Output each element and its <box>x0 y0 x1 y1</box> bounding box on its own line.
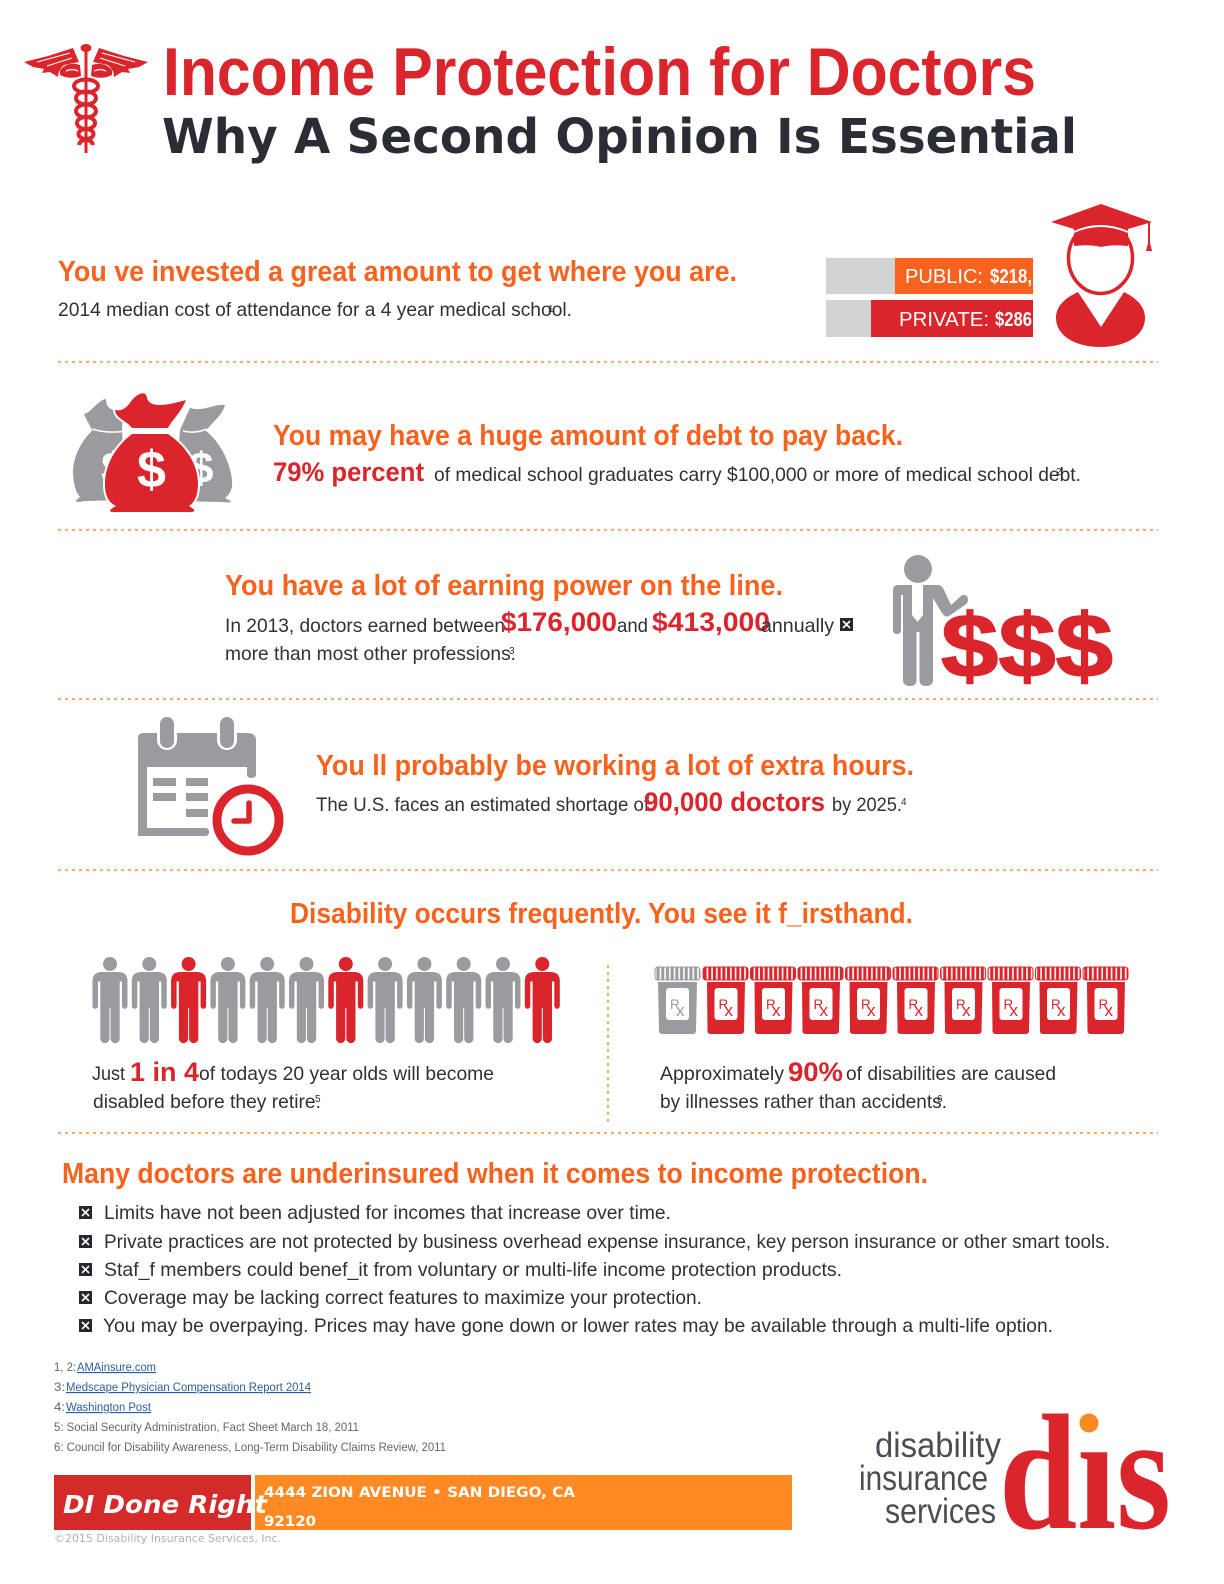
pictogram: prescription bottles <box>655 967 1128 1034</box>
bullet list: Private practices are not protected by business overhead expense insurance, key person insurance or other smart tools. <box>104 1231 1110 1253</box>
pictogram: prescription bottles: R <box>861 997 871 1012</box>
body text: 4 <box>901 797 907 808</box>
footnotes: 3: <box>54 1382 65 1394</box>
text: 1 in 4: disabled before they retire. <box>93 1091 321 1113</box>
bullet list: Limits have not been adjusted for incomes that increase over time. <box>104 1202 671 1224</box>
icon: money bags: $ <box>137 441 166 499</box>
stat: 79% percent: 79% percent <box>273 457 424 487</box>
heading: You have a lot of earning power on the line. <box>225 570 783 602</box>
pictogram: prescription bottles: R <box>908 997 918 1012</box>
pictogram: prescription bottles: x <box>914 1001 924 1020</box>
bar: private cost: $286 <box>995 309 1032 331</box>
pictogram: prescription bottles: R <box>956 997 966 1012</box>
text: 90%: by illnesses rather than accidents. <box>660 1091 947 1113</box>
footnotes: Washington Post <box>66 1402 152 1414</box>
footnote marker: 3 <box>509 646 515 657</box>
heading: You ve invested a great amount to get where you are. <box>58 256 737 288</box>
pictogram: prescription bottles: R <box>1098 997 1108 1012</box>
icon: businessman <box>893 555 968 686</box>
text: 1 in 4: Just <box>92 1063 126 1085</box>
icon: calendar and clock <box>138 717 279 851</box>
pictogram: prescription bottles: R <box>1004 997 1014 1012</box>
body text line 1: $176,000 <box>501 607 617 637</box>
heading: You ll probably be working a lot of extra hours. <box>316 750 914 782</box>
icon: money bags <box>73 393 232 512</box>
pictogram: prescription bottles: R <box>718 997 728 1012</box>
heading: Many doctors are underinsured when it comes to income protection. <box>62 1158 928 1190</box>
text: 90% <box>660 1057 1056 1113</box>
body text line 2: more than most other professions. <box>225 643 516 665</box>
logo: disability insurance services: services <box>885 1492 996 1531</box>
bar: public cost: $218, <box>990 266 1032 288</box>
logo: disability insurance services: insurance <box>859 1459 988 1498</box>
text: 1 in 4: 1 in 4 <box>130 1057 199 1087</box>
pictogram: prescription bottles: R <box>766 997 776 1012</box>
panel: disability frequency <box>92 898 1128 1126</box>
bullet list <box>79 1202 1110 1337</box>
logo: disability insurance services <box>859 1381 1171 1564</box>
footnotes: AMAinsure.com <box>77 1362 156 1374</box>
bullet list: Staf_f members could benef_it from voluntary or multi-life income protection products. <box>104 1259 842 1281</box>
bar: public cost: PUBLIC: <box>905 266 983 288</box>
logo: disability insurance services: dis <box>999 1381 1171 1564</box>
body text line 1: In 2013, doctors earned between <box>225 615 505 637</box>
subtitle: Why A Second Opinion Is Essential <box>162 109 1077 165</box>
text: 1 in 4: 5 <box>315 1094 321 1105</box>
logo: disability insurance services: disability <box>875 1426 1001 1465</box>
footnotes: 6: Council for Disability Awareness, Long-Term Disability Claims Review, 2011 <box>54 1442 446 1454</box>
body text: 2014 median cost of attendance for a 4 year medical school. <box>58 299 572 321</box>
footnotes: Medscape Physician Compensation Report 2014 <box>66 1382 312 1394</box>
body text line 1: annually <box>761 615 834 637</box>
text: 1 in 4 <box>92 1057 494 1113</box>
icon: dollar signs: $$$ <box>941 597 1113 697</box>
pictogram: people 1 in 4 <box>92 957 560 1043</box>
body text: 90,000 doctors <box>644 787 825 817</box>
pictogram: prescription bottles: x <box>867 1001 876 1020</box>
copyright: ©2015 Disability Insurance Services, Inc. <box>54 1533 281 1545</box>
footnotes: 4: <box>54 1402 65 1414</box>
text: 90%: 6 <box>937 1094 943 1105</box>
panel: investment <box>58 204 1152 347</box>
bullet list: Coverage may be lacking correct features to maximize your protection. <box>104 1287 702 1309</box>
pictogram: prescription bottles: x <box>962 1001 971 1020</box>
bullet list: You may be overpaying. Prices may have gone down or lower rates may be available through a multi-life option. <box>103 1315 1053 1337</box>
heading: You may have a huge amount of debt to pay back. <box>273 420 903 452</box>
body text: The U.S. faces an estimated shortage of <box>316 794 650 816</box>
body text: by 2025. <box>832 794 902 816</box>
body text line 1: and <box>617 615 648 637</box>
footnotes: 1, 2: <box>54 1362 76 1374</box>
text: 1 in 4: of todays 20 year olds will become <box>199 1063 494 1085</box>
pictogram: prescription bottles: x <box>1104 1001 1114 1020</box>
panel: earning power <box>225 555 1113 697</box>
body text <box>316 787 907 817</box>
pictogram: prescription bottles: x <box>772 1001 781 1020</box>
icon: graduate <box>1051 204 1152 347</box>
icon: money bags: $ <box>101 444 125 493</box>
footer address: 4444 ZION AVENUE • SAN DIEGO, CA <box>264 1485 576 1501</box>
body text line 1 <box>225 607 853 637</box>
icon: money bags: $ <box>189 444 213 493</box>
panel: underinsured <box>62 1158 1110 1337</box>
pictogram: prescription bottles: x <box>724 1001 734 1020</box>
pictogram: prescription bottles: x <box>1010 1001 1018 1020</box>
title: Income Protection for Doctors <box>163 34 1036 110</box>
heading: Disability occurs frequently. You see it f_irsthand. <box>290 898 913 930</box>
footnote marker: 1 <box>548 304 554 315</box>
body text: of medical school graduates carry $100,000 or more of medical school debt. <box>434 464 1081 486</box>
footer bar: DI Done Right: DI Done Right <box>63 1490 268 1519</box>
bar: public cost <box>826 258 1033 294</box>
footnotes: 5: Social Security Administration, Fact Sheet March 18, 2011 <box>54 1422 359 1434</box>
footnote marker: 2 <box>1056 467 1062 478</box>
bar: private cost <box>826 300 1033 337</box>
pictogram: prescription bottles: R <box>1051 997 1061 1012</box>
pictogram: prescription bottles: x <box>1057 1001 1066 1020</box>
pictogram: prescription bottles: x <box>820 1001 828 1020</box>
text: 90%: 90% <box>788 1057 843 1087</box>
footer bar: DI Done Right <box>54 1475 792 1530</box>
panel: debt <box>73 393 1081 512</box>
pictogram: prescription bottles: R <box>670 997 680 1012</box>
text: 90%: of disabilities are caused <box>846 1063 1056 1085</box>
footer address: 92120 <box>264 1514 316 1530</box>
footer address <box>264 1485 576 1530</box>
icon: caduceus <box>24 44 148 153</box>
panel: extra hours <box>138 717 914 851</box>
text: 90%: Approximately <box>660 1063 784 1085</box>
pictogram: prescription bottles: R <box>814 997 824 1012</box>
footnotes <box>54 1362 446 1454</box>
bar: private cost: PRIVATE: <box>899 309 989 331</box>
pictogram: prescription bottles: x <box>676 1001 685 1020</box>
body text line 1: $413,000 <box>652 607 770 637</box>
